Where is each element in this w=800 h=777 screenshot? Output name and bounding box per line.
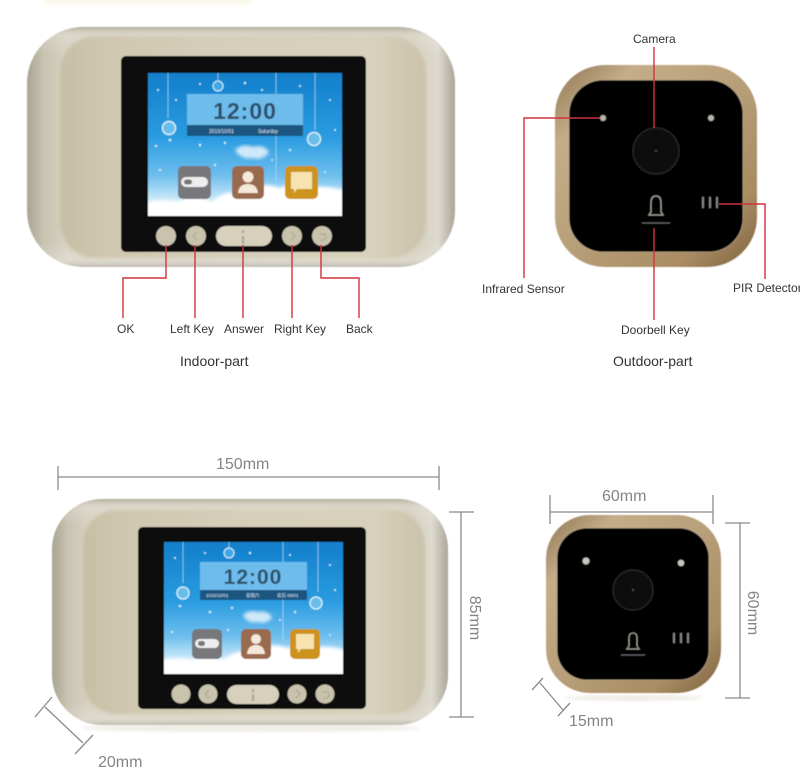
outdoor labels: Infrared Sensor: [482, 282, 565, 296]
icon: settings: [178, 166, 211, 199]
outdoor callout lines: [524, 47, 765, 320]
icon: bell: [649, 196, 663, 215]
dimension: 20mm: [35, 697, 142, 771]
indoor labels: Right Key: [274, 322, 326, 336]
icon: PIR bars: [703, 197, 717, 208]
clock panel: [187, 94, 303, 125]
indoor labels: OK: [117, 322, 134, 336]
outdoor labels: Doorbell Key: [621, 323, 690, 337]
dimension: 60mm width: [550, 488, 713, 524]
dimension: 60mm width: 60mm: [602, 488, 646, 505]
outdoor unit device: [555, 65, 757, 267]
screen: 12:00: [213, 98, 277, 124]
screen: 农历 09/01: [277, 592, 299, 599]
buttons: [156, 226, 332, 246]
outdoor dimension device: [546, 515, 721, 701]
icon: settings: [192, 629, 222, 659]
outdoor labels: [482, 32, 800, 337]
dimension: 85mm: [449, 512, 483, 717]
icon: PIR bars: [674, 633, 688, 643]
screen bezel: [121, 56, 366, 252]
indoor callout lines: [123, 245, 359, 318]
dimension: 20mm: 20mm: [98, 754, 142, 771]
dimension: 60mm height: [725, 523, 761, 698]
outdoor labels: PIR Detector: [733, 281, 800, 295]
icon: contact: [241, 629, 271, 659]
icon: notebook: [290, 629, 320, 659]
clock panel: [200, 562, 307, 590]
dimension: 15mm: [532, 678, 613, 730]
outdoor caption: Outdoor-part: [613, 353, 692, 369]
indoor labels: Answer: [224, 322, 264, 336]
indoor caption: Indoor-part: [180, 353, 249, 369]
indoor labels: Back: [346, 322, 374, 336]
icon: notebook: [285, 166, 318, 199]
screen: Saturday: [258, 129, 279, 135]
faint header strip: [45, 0, 250, 3]
outdoor labels: Camera: [633, 32, 676, 46]
dimension: 85mm: 85mm: [466, 596, 483, 640]
dimension: 15mm: 15mm: [569, 713, 613, 730]
dimension: 150mm: 150mm: [216, 456, 269, 473]
indoor unit device: [27, 27, 455, 267]
screen: 2016/10/01: [206, 593, 229, 598]
screen: [163, 541, 344, 675]
dimension: 150mm: [58, 456, 439, 490]
screen: 2016/10/01: [209, 129, 234, 135]
indoor labels: [117, 322, 374, 336]
screen bezel: [138, 527, 366, 709]
dimension: 60mm height: 60mm: [744, 591, 761, 635]
icon: contact: [232, 166, 264, 199]
screen: 星期六: [246, 592, 260, 599]
indoor dimension device: [52, 499, 448, 732]
indoor labels: Left Key: [170, 322, 214, 336]
screen: [147, 72, 343, 217]
buttons: [172, 684, 334, 704]
screen: 12:00: [224, 566, 282, 589]
icon: bell: [627, 633, 639, 649]
